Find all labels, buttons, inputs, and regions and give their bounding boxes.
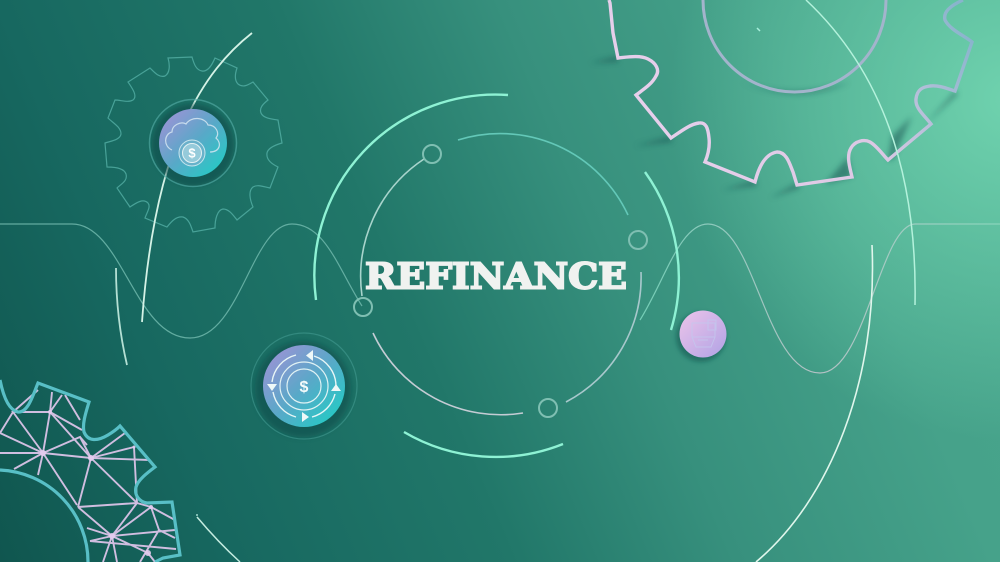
inner arc lower-right — [566, 272, 641, 402]
small dash — [757, 28, 760, 31]
arc: bottom-left short — [197, 517, 240, 562]
cloud — [166, 118, 219, 152]
outer arc right — [645, 172, 679, 330]
icon disc — [263, 345, 345, 427]
gear shadows — [590, 56, 958, 198]
icon shadow — [255, 341, 351, 437]
mesh gear inner arc — [0, 470, 88, 562]
arc: right long lower — [756, 245, 873, 562]
mesh gear outline — [0, 380, 180, 562]
arc: upper-left long white — [142, 33, 252, 322]
gear inner circle — [703, 0, 886, 92]
outer arc bottom — [404, 432, 563, 457]
gear: top-right large outline — [590, 0, 972, 198]
mesh struts — [0, 390, 176, 562]
arc: left short — [116, 268, 127, 365]
ring nodes — [354, 145, 647, 417]
glyph — [692, 320, 716, 347]
icon halo — [150, 100, 236, 186]
arrowheads — [267, 350, 341, 422]
icon shadow — [676, 312, 726, 362]
outer arc upper-left — [314, 95, 508, 300]
node top — [423, 145, 441, 163]
gear: bottom-left mesh — [0, 380, 180, 562]
icon: pink document badge — [676, 310, 726, 362]
node bottom — [539, 399, 557, 417]
wave line left — [0, 224, 362, 338]
inner ring — [287, 369, 321, 403]
icon disc — [159, 109, 227, 177]
middle rings — [280, 362, 328, 410]
inner arc left — [361, 159, 424, 296]
mesh nodes — [40, 410, 153, 556]
coin rings — [179, 140, 205, 166]
icon shadow — [152, 104, 234, 186]
icon disc — [680, 310, 726, 358]
wave line right — [640, 224, 1000, 373]
node right — [629, 231, 647, 249]
dot near bottom-left arc — [196, 514, 198, 516]
title: REFINANCE — [365, 256, 627, 298]
inner arc lower-left — [373, 333, 523, 415]
dollar sign: $ — [188, 146, 196, 160]
outer arrow ring — [272, 355, 336, 417]
icon: circular refinance arrows — [251, 333, 357, 439]
gear outer outline — [609, 0, 972, 185]
central ring: inner arcs — [361, 134, 641, 415]
arc: right long upper — [806, 0, 915, 305]
node left — [354, 298, 372, 316]
icon: cloud with dollar — [150, 100, 236, 186]
central ring: outer arcs — [314, 95, 679, 457]
inner arc top — [458, 134, 628, 215]
icon halo — [251, 333, 357, 439]
gear: upper-left thin outline — [105, 57, 282, 232]
coin inner ring — [182, 144, 202, 162]
dollar sign: $ — [300, 379, 309, 396]
